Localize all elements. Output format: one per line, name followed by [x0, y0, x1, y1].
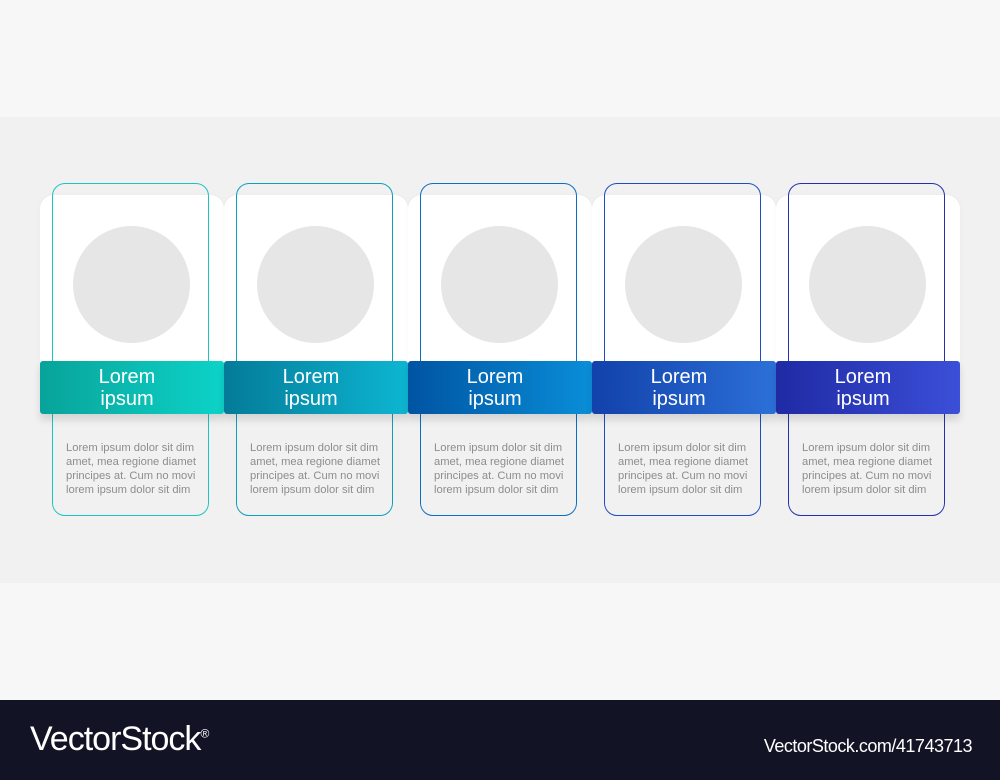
url: VectorStock.com/41743713: [764, 736, 972, 756]
text 1: Lorem ipsum dolor sit dim amet, mea regione diamet principes at. Cum no movi lorem ipsum dolor sit dim: [66, 442, 196, 496]
image placeholder 2: [257, 226, 374, 343]
label 3: ipsum: [468, 388, 522, 410]
card 3: [406, 183, 594, 516]
logo: VectorStock®: [30, 720, 208, 758]
text 5: Lorem ipsum dolor sit dim amet, mea regione diamet principes at. Cum no movi lorem ipsum dolor sit dim: [802, 442, 932, 496]
text 4: Lorem ipsum dolor sit dim amet, mea regione diamet principes at. Cum no movi lorem ipsum dolor sit dim: [618, 442, 748, 496]
image placeholder 5: [809, 226, 926, 343]
label 4: ipsum: [652, 388, 706, 410]
label 2: Lorem: [283, 366, 339, 388]
label 4: [592, 361, 776, 414]
text 2: Lorem ipsum dolor sit dim amet, mea regione diamet principes at. Cum no movi lorem ipsum dolor sit dim: [250, 442, 380, 496]
label 1: [40, 361, 224, 414]
image placeholder 4: [625, 226, 742, 343]
background band: [0, 117, 1000, 583]
outline 3: [420, 183, 577, 516]
label 5: ipsum: [836, 388, 890, 410]
label 1: Lorem: [99, 366, 155, 388]
label 1: ipsum: [100, 388, 154, 410]
label 2: [224, 361, 408, 414]
outline 4: [604, 183, 761, 516]
label 5: Lorem: [835, 366, 891, 388]
outline 2: [236, 183, 393, 516]
label 4: Lorem: [651, 366, 707, 388]
card 5: [774, 183, 962, 516]
label 3: Lorem: [467, 366, 523, 388]
image placeholder 1: [73, 226, 190, 343]
label 2: ipsum: [284, 388, 338, 410]
label 5: [776, 361, 960, 414]
footer: [0, 700, 1000, 780]
text 3: Lorem ipsum dolor sit dim amet, mea regione diamet principes at. Cum no movi lorem ipsum dolor sit dim: [434, 442, 564, 496]
card 4: [590, 183, 778, 516]
outline 1: [52, 183, 209, 516]
label 3: [408, 361, 592, 414]
image placeholder 3: [441, 226, 558, 343]
card 1: [38, 183, 226, 516]
card 2: [222, 183, 410, 516]
outline 5: [788, 183, 945, 516]
